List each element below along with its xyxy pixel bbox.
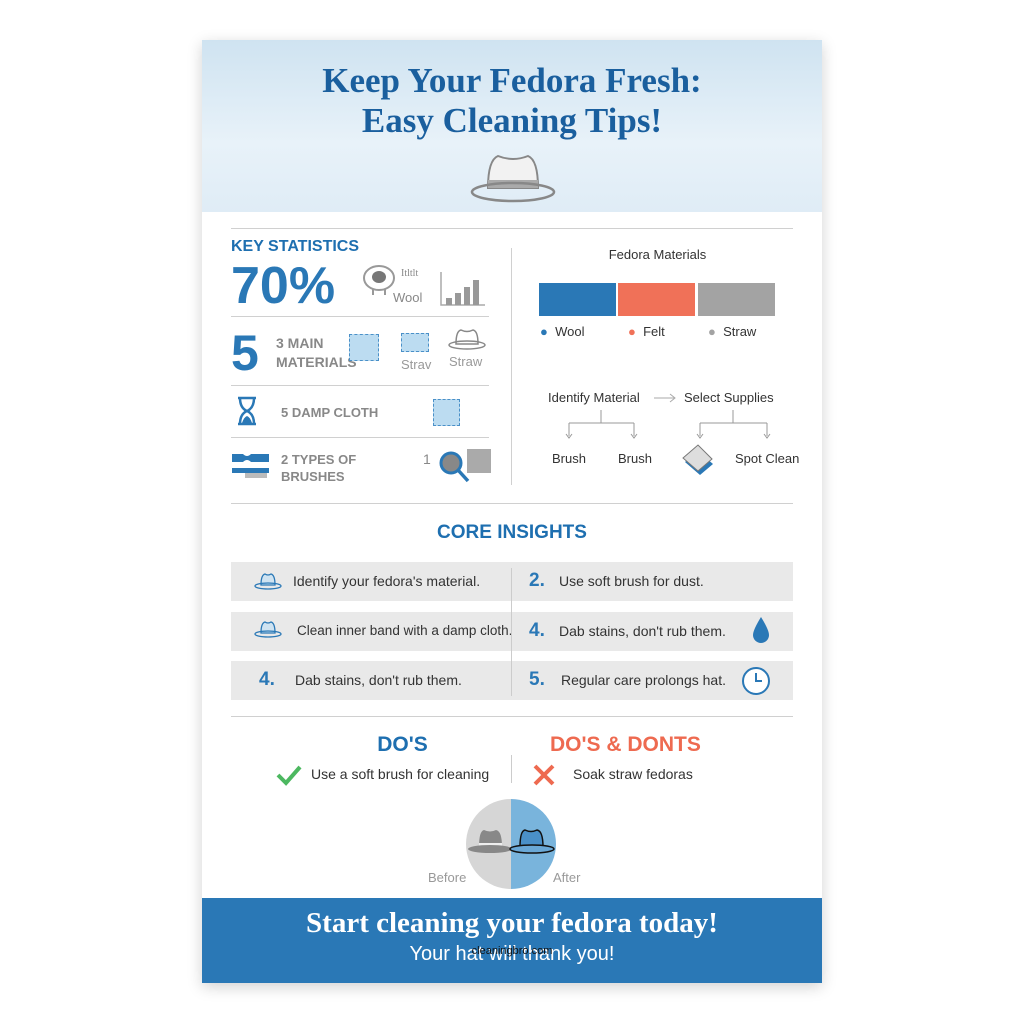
panel: fedora materials chart: ● Felt [628, 324, 665, 339]
title: Keep Your Fedora Fresh: [322, 61, 702, 100]
heading: KEY STATISTICS [231, 238, 359, 255]
flowchart: Brush [618, 451, 652, 466]
flowchart: Brush [552, 451, 586, 466]
before/after graphic: After [553, 870, 580, 885]
icon: sheep [363, 265, 395, 295]
insight row 3: Regular care prolongs hat. [561, 672, 726, 688]
don'ts [534, 733, 701, 786]
panel: fedora materials chart [539, 247, 799, 475]
insight row 3: 4. [259, 669, 275, 690]
insight row 3 [231, 661, 793, 700]
flowchart [548, 390, 799, 475]
key statistics panel: BRUSHES [281, 469, 345, 484]
insight row 2: Dab stains, don't rub them. [559, 623, 726, 639]
key statistics panel: 2 TYPES OF [281, 452, 356, 467]
key statistics panel: MATERIALS [276, 354, 357, 370]
footer banner: Start cleaning your fedora today! [306, 907, 718, 939]
insight row 3: 5. [529, 669, 545, 690]
insight row 1: Use soft brush for dust. [559, 573, 704, 589]
key statistics panel: 1 [423, 451, 431, 467]
panel: fedora materials chart: Fedora Materials [609, 247, 706, 262]
header [202, 40, 822, 212]
insight row 2 [231, 612, 793, 651]
key statistics panel: Itltlt [401, 268, 418, 279]
text: Use a soft brush for cleaning [311, 766, 489, 782]
stat 5 materials: 5 [231, 325, 259, 381]
text: DO'S & DONTS [550, 733, 701, 756]
key statistics panel [231, 238, 491, 484]
title: Easy Cleaning Tips! [362, 101, 662, 140]
heading: core insights: CORE INSIGHTS [437, 522, 587, 543]
text: Soak straw fedoras [573, 766, 693, 782]
panel: fedora materials chart: ● Straw [708, 324, 756, 339]
insight row 2: Clean inner band with a damp cloth. [297, 623, 512, 638]
insight row 1: 2. [529, 570, 545, 591]
bar chart [539, 283, 616, 316]
before/after graphic [428, 799, 580, 889]
footer banner: Your hat will thank you! [410, 943, 614, 965]
key statistics panel: Strav [401, 357, 431, 372]
icon: check [276, 766, 302, 786]
insight row 1: Identify your fedora's material. [293, 573, 480, 589]
footer banner: cleaningbro.com [472, 945, 552, 957]
title [322, 61, 702, 140]
insight row 3: Dab stains, don't rub them. [295, 672, 462, 688]
icon: bar chart [440, 272, 485, 306]
key statistics panel: Wool [393, 290, 422, 305]
icon: brushes [232, 454, 269, 478]
key statistics panel: Straw [449, 354, 482, 369]
stat 70%: 70% [231, 257, 335, 315]
flowchart: Identify Material [548, 390, 640, 405]
flowchart: Select Supplies [684, 390, 774, 405]
text: DO'S [377, 733, 428, 756]
key statistics panel: 5 DAMP CLOTH [281, 405, 378, 420]
flowchart: Spot Clean [735, 451, 799, 466]
do's [276, 733, 489, 786]
footer banner [202, 898, 822, 983]
icon: hat [470, 155, 556, 202]
icon: cross [534, 764, 554, 786]
before/after graphic: Before [428, 870, 466, 885]
icon: hat outline [448, 329, 486, 350]
insight row 2: 4. [529, 620, 545, 641]
legend: ● Wool [540, 324, 584, 339]
icon: magnifier [440, 452, 470, 482]
icon: hourglass [238, 396, 256, 426]
insight row 1 [231, 562, 793, 601]
key statistics panel: 3 MAIN [276, 335, 323, 351]
